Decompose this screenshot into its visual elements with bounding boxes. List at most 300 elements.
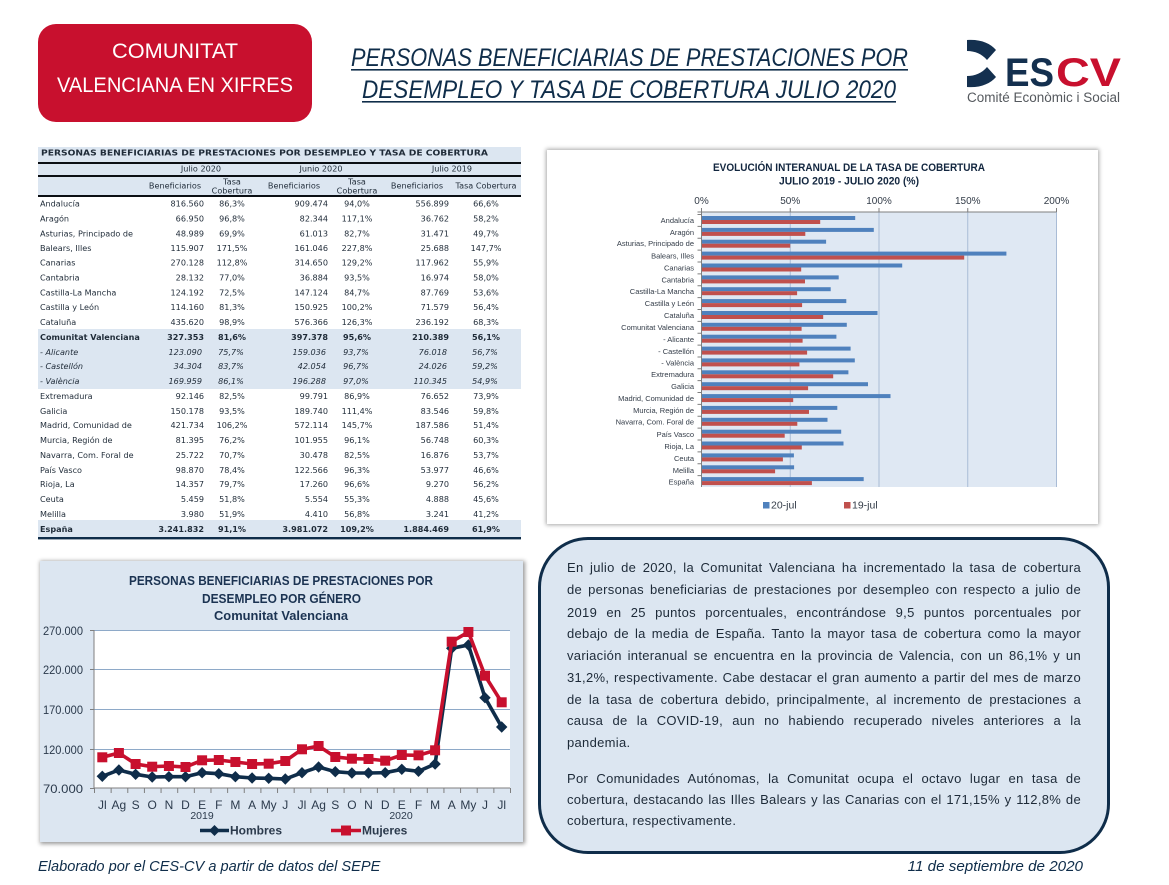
footer source: Elaborado por el CES-CV a partir de datos del SEPE [38,859,380,875]
row: Canarias [40,258,499,268]
text panel: comentario: cobertura, respectivamente. [567,813,736,828]
category labels: - Alicante [663,335,694,344]
text panel: comentario: causa de la COVID-19, aun no habiendo recuperado niveles anteriores a la [567,713,1081,728]
category labels: Cantabria [661,276,695,284]
category labels: Balears, Illes [651,252,694,260]
x axis labels: My [261,798,277,812]
row: Cataluña [40,317,499,327]
row: Aragón: 96,8% [219,214,245,224]
row: Aragón: 66.950 [176,214,204,224]
row: Madrid: 145,7% [342,420,373,430]
row: Asturias: 49,7% [473,228,499,238]
text panel: comentario: variación interanual se encuentra en la provincia de Valencia, con un 86,1% y un [567,648,1081,663]
row: Alicante: - Alicante [40,347,78,357]
row: España: 1.884.469 [403,524,449,534]
row: Castilla y León: 81,3% [219,302,245,312]
x axis labels: N [165,798,173,812]
row: València [40,376,498,386]
row: Rioja: 17.260 [300,479,328,489]
x axis labels: J [282,798,288,812]
row: Madrid: 421.734 [171,420,204,430]
row: Extremadura: 99.791 [300,391,328,401]
text panel: comentario: debajo de la media de España. Tanto la mayor tasa de cobertura como la mayor [567,626,1081,641]
row: Aragón: 117,1% [342,214,373,224]
row: Balears: 25.688 [421,243,449,253]
row: València: 54,9% [472,376,498,386]
row: Murcia: 101.955 [295,435,328,445]
row: Cataluña: 98,9% [219,317,245,327]
row: Ceuta: 5.459 [181,494,204,504]
x axis labels: A [448,798,456,812]
row: Navarra: 53,7% [473,450,499,460]
y axis labels [43,624,83,796]
row: País Vasco: 53.977 [421,465,449,475]
footer date: 11 de septiembre de 2020 [908,858,1083,875]
x axis labels: Jl [497,798,506,812]
row: Murcia: Murcia, Región de [40,435,112,445]
row: Extremadura: 76.652 [421,391,449,401]
row: Balears: 147,7% [471,243,502,253]
text panel: comentario: 2019 en 25 puntos porcentuales, encontrándose 9,5 puntos porcentuales por [567,605,1081,620]
y axis labels: 170.000 [43,703,83,717]
row: Rioja: 96,6% [344,479,370,489]
row: Castilla y León: Castilla y León [40,302,99,312]
row: Castellón: 83,7% [218,361,244,371]
chart title: JULIO 2019 - JULIO 2020 (%) [779,176,919,188]
row: Castilla-La Mancha: 53,6% [473,288,499,298]
row: Cataluña: 576.366 [295,317,328,327]
row: España: 61,9% [472,524,500,534]
axis labels: 150% [955,196,981,207]
table header: Julio 2019 [431,164,472,174]
legend [200,824,408,838]
chart title: Comunitat Valenciana [214,608,349,623]
row: Cataluña: 435.620 [171,317,204,327]
row: Murcia: 56.748 [421,435,449,445]
row: Cataluña: 236.192 [416,317,449,327]
x axis labels: O [148,798,157,812]
y axis labels: 220.000 [43,663,83,677]
row: Comunitat Valenciana [40,332,500,342]
chart title [129,573,434,623]
row: Canarias: 314.650 [295,258,328,268]
row: Castellón: 34.304 [174,361,202,371]
row: València: 86,1% [218,376,244,386]
row: Andalucía: Andalucía [40,198,80,208]
row: Asturias: 69,9% [219,228,245,238]
text panel: comentario: 31,2%, respectivamente. Cabe destacar el gran aumento a partir del mes de marzo [567,670,1081,685]
x axis labels: E [398,798,406,812]
category labels: Ceuta [674,454,695,463]
title: PERSONAS BENEFICIARIAS DE PRESTACIONES POR [351,44,908,72]
row: Ceuta: Ceuta [40,494,64,504]
row: Castilla-La Mancha: Castilla-La Mancha [40,288,116,298]
row: Cantabria: Cantabria [40,272,80,282]
badge: Comunitat Valenciana en xifres [38,24,312,122]
row: Canarias: 55,9% [473,258,499,268]
row: Ceuta: 51,8% [219,494,245,504]
row: Cantabria: 58,0% [473,272,499,282]
row: Comunitat Valenciana: Comunitat Valenciana [40,332,140,342]
row: Extremadura: 86,9% [344,391,370,401]
row: Castellón: 96,7% [343,361,369,371]
row: Melilla: 3.241 [426,509,449,519]
logo: CES-CV: Comité Econòmic i Social [967,90,1120,105]
title [351,44,908,104]
row: Castellón: 42.054 [298,361,326,371]
row: Comunitat Valenciana: 95,6% [343,332,371,342]
row: Castilla y León: 71.579 [421,302,449,312]
row: País Vasco: 96,3% [344,465,370,475]
bar chart: tasa de cobertura [616,161,1069,512]
table header: Beneficiarios [149,180,201,190]
year labels [190,810,413,822]
row: País Vasco: 78,4% [219,465,245,475]
x axis labels: D [381,798,390,812]
panel: line chart background [40,561,523,842]
text panel: comentario: cobertura, destacando las Illes Balears y las Canarias con el 171,15% y 112,8% de [567,792,1081,807]
row: Balears: 115.907 [171,243,204,253]
row: Castilla y León: 114.160 [171,302,204,312]
text panel: comentario: En julio de 2020, la Comunitat Valenciana ha incrementado la tasa de cobertura [567,560,1081,575]
row: Balears: 161.046 [295,243,328,253]
category labels: Asturias, Principado de [617,239,694,248]
row: Melilla [40,509,499,519]
x axis labels: S [132,798,140,812]
row: Galicia: 189.740 [295,406,328,416]
table header [149,164,517,196]
row: País Vasco: 98.870 [176,465,204,475]
axis labels: 100% [866,196,892,207]
row: Asturias: 48.989 [176,228,204,238]
table header: Beneficiarios [391,180,443,190]
row: Castilla-La Mancha: 147.124 [295,288,328,298]
row: Alicante: 76.018 [419,347,447,357]
row: Canarias: 270.128 [171,258,204,268]
row: País Vasco: 122.566 [295,465,328,475]
row: Cataluña: 68,3% [473,317,499,327]
row: Canarias: 117.962 [416,258,449,268]
x axis labels: Ag [311,798,326,812]
axis labels: 200% [1044,196,1069,207]
row: Rioja: Rioja, La [40,479,75,489]
series: Mujeres [98,628,506,772]
x axis labels: E [198,798,206,812]
table title: PERSONAS BENEFICIARIAS DE PRESTACIONES POR DESEMPLEO Y TASA DE COBERTURA [41,148,489,158]
badge: Comunitat Valenciana en xifres: VALENCIANA EN XIFRES [57,74,293,97]
row: Melilla: 3.980 [181,509,204,519]
table header: Tasa [347,176,366,186]
table header: Tasa [222,176,241,186]
row: Asturias: 61.013 [300,228,328,238]
row: Castilla-La Mancha [40,288,499,298]
axis labels: 0% [694,196,709,207]
row: Ceuta: 55,3% [344,494,370,504]
row: Asturias: 82,7% [344,228,370,238]
row: Madrid: 106,2% [217,420,248,430]
row: Galicia [40,406,499,416]
x axis labels: F [215,798,222,812]
table header: Cobertura [212,186,252,196]
row: Murcia: 76,2% [219,435,245,445]
row: Rioja: 56,2% [473,479,499,489]
row: Madrid [40,420,499,430]
row: Andalucía: 94,0% [344,198,370,208]
badge: Comunitat Valenciana en xifres: COMUNITAT [112,40,238,63]
year labels: 2019 [190,810,214,822]
row: España: 3.981.072 [282,524,328,534]
row: Aragón: Aragón [40,214,69,224]
row: Madrid: Madrid, Comunidad de [40,420,132,430]
row: Galicia: 93,5% [219,406,245,416]
row: Navarra: 16.876 [421,450,449,460]
category labels: Aragón [670,228,694,237]
row: Castellón: 24.026 [419,361,447,371]
category labels: Andalucía [661,216,695,225]
x axis labels: J [482,798,488,812]
row: Murcia: 60,3% [473,435,499,445]
legend [763,500,878,512]
row: Castellón: 59,2% [472,361,498,371]
row: València: 110.345 [414,376,447,386]
category labels: Comunitat Valenciana [621,323,695,332]
chart title: DESEMPLEO POR GÉNERO [202,591,361,606]
row: Rioja: 14.357 [176,479,204,489]
row: Melilla: 4.410 [305,509,328,519]
row: Comunitat Valenciana: 210.389 [412,332,449,342]
row: País Vasco: 46,6% [473,465,499,475]
row: Melilla: Melilla [40,509,66,519]
category labels: Castilla-La Mancha [630,287,695,296]
category labels: Castilla y León [645,299,694,308]
row: Cataluña: 126,3% [342,317,373,327]
row: Cantabria: 36.884 [300,272,328,282]
row: Castilla y León: 100,2% [342,302,373,312]
x axis labels: Jl [98,798,107,812]
logo: CES-CV: CV [1056,51,1121,95]
row: Castilla y León: 56,4% [473,302,499,312]
row: Canarias: 129,2% [342,258,373,268]
row: Cantabria: 28.132 [176,272,204,282]
category labels: Cataluña [664,311,695,320]
row: Navarra [40,450,499,460]
text panel: comentario: de la tasa de cobertura debido, principalmente, al incremento de prestaciones a [567,692,1081,707]
category labels: Madrid, Comunidad de [618,394,694,403]
x axis labels: A [248,798,256,812]
y axis labels: 270.000 [43,624,83,638]
table header: Tasa Cobertura [455,180,517,190]
row: Canarias: 112,8% [217,258,248,268]
row: Castilla-La Mancha: 84,7% [344,288,370,298]
row: Melilla: 51,9% [219,509,245,519]
text panel: comentario [538,537,1110,854]
category labels: Rioja, La [664,442,695,451]
x axis labels: M [430,798,440,812]
row: España: 109,2% [340,524,374,534]
series: 20-jul [702,216,1006,481]
row: Balears: Balears, Illes [40,243,91,253]
row: Madrid: 572.114 [295,420,328,430]
row: País Vasco: País Vasco [40,465,82,475]
row: Alicante: 56,7% [472,347,498,357]
legend: Hombres [230,824,282,838]
row: Galicia: Galicia [40,406,67,416]
category labels: País Vasco [657,430,694,439]
row: Rioja: 79,7% [219,479,245,489]
axis labels [694,196,1069,207]
row: Alicante: 93,7% [343,347,369,357]
row: España: España [40,524,73,534]
row: Extremadura: 73,9% [473,391,499,401]
row: Cantabria: 77,0% [219,272,245,282]
row: València: 169.959 [169,376,202,386]
category labels: - València [661,358,695,368]
row: Canarias: Canarias [40,258,75,268]
row: Cantabria [40,272,499,282]
table: beneficiarios y tasa de cobertura [38,147,521,540]
row: Extremadura: Extremadura [40,391,93,401]
row: Aragón: 58,2% [473,214,499,224]
row: Comunitat Valenciana: 397.378 [291,332,328,342]
row: Andalucía: 66,6% [473,198,499,208]
row: Madrid: 51,4% [473,420,499,430]
row: España: 91,1% [218,524,246,534]
row: España: 3.241.832 [158,524,204,534]
row: Asturias: 31.471 [421,228,449,238]
row: Cantabria: 16.974 [421,272,449,282]
text panel: comentario: pandemia. [567,735,630,750]
row: Galicia: 59,8% [473,406,499,416]
row: Asturias: Asturias, Principado de [40,228,133,238]
row: Castellón [40,361,498,371]
table header: Junio 2020 [298,164,343,174]
row: Navarra: 30.478 [300,450,328,460]
row: Extremadura [40,391,499,401]
row: Andalucía: 909.474 [295,198,328,208]
legend: 20-jul [771,500,797,512]
row: Navarra: 82,5% [344,450,370,460]
row: Comunitat Valenciana: 81,6% [218,332,246,342]
row: València: 196.288 [293,376,326,386]
row: Castilla y León [40,302,499,312]
row: Navarra: Navarra, Com. Foral de [40,450,134,460]
axis labels: 50% [780,196,800,207]
row: Galicia: 83.546 [421,406,449,416]
row: España [40,524,500,534]
row: Alicante: 123.090 [169,347,202,357]
row: Asturias [40,228,499,238]
title: DESEMPLEO Y TASA DE COBERTURA JULIO 2020 [362,76,896,104]
row: País Vasco [40,465,499,475]
row: Andalucía: 86,3% [219,198,245,208]
x axis labels: F [415,798,422,812]
row: Murcia [40,435,499,445]
row: Comunitat Valenciana: 327.353 [167,332,204,342]
row: Andalucía: 556.899 [416,198,449,208]
row: Navarra: 25.722 [176,450,204,460]
year labels: 2020 [389,810,413,822]
logo: CES-CV [967,40,1121,105]
category labels: España [669,478,695,486]
row: Ceuta: 45,6% [473,494,499,504]
row: Rioja: 9.270 [426,479,449,489]
row: Murcia: 81.395 [176,435,204,445]
category labels: Canarias [664,264,694,272]
chart title: EVOLUCIÓN INTERANUAL DE LA TASA DE COBERTURA [713,161,985,174]
row: Extremadura: 82,5% [219,391,245,401]
row: València: - València [40,376,80,386]
series: 19-jul [702,220,964,485]
x axis labels: D [181,798,190,812]
legend: Mujeres [362,824,408,838]
row: Castellón: - Castellón [40,361,83,371]
row: Alicante: 159.036 [293,347,326,357]
x axis labels: My [460,798,476,812]
x axis labels: Jl [298,798,306,812]
row: Alicante [40,347,498,357]
y axis labels: 70.000 [43,782,83,796]
row: Castilla y León: 150.925 [295,302,328,312]
row: Ceuta [40,494,499,504]
row: Cantabria: 93,5% [344,272,370,282]
row: Madrid: 187.586 [416,420,449,430]
legend: 19-jul [852,500,878,512]
panel: bar chart evolución interanual [547,150,1098,524]
row: Extremadura: 92.146 [176,391,204,401]
row: Murcia: 96,1% [344,435,370,445]
row: Andalucía: 816.560 [171,198,204,208]
row: Cataluña: Cataluña [40,317,76,327]
row: Balears: 227,8% [342,243,373,253]
category labels: Galicia [671,382,695,391]
row: Castilla-La Mancha: 124.192 [171,288,204,298]
logo: CES-CV: ES [1005,51,1054,95]
category labels: Extremadura [651,370,695,379]
series: Hombres [97,640,507,784]
x axis labels: M [230,798,240,812]
text panel: comentario: Por Comunidades Autónomas, la Comunitat ocupa el octavo lugar en tasa de [567,771,1081,786]
table header: Beneficiarios [268,180,320,190]
x axis labels: S [331,798,339,812]
row: Ceuta: 4.888 [426,494,449,504]
row: Galicia: 150.178 [171,406,204,416]
row: Balears: 171,5% [217,243,248,253]
row: Aragón: 82.344 [300,214,328,224]
row: Castilla-La Mancha: 72,5% [219,288,245,298]
row: Aragón [40,214,499,224]
row: València: 97,0% [343,376,369,386]
category labels: Melilla [673,466,695,475]
row: Rioja [40,479,499,489]
chart title: PERSONAS BENEFICIARIAS DE PRESTACIONES POR [129,573,434,588]
x axis labels [98,798,506,812]
category labels: Murcia, Región de [633,406,694,415]
row: Comunitat Valenciana: 56,1% [472,332,500,342]
table header: Julio 2020 [180,164,221,174]
x axis labels: O [347,798,357,812]
x axis labels: N [364,798,373,812]
row: Alicante: 75,7% [218,347,244,357]
row: Melilla: 41,2% [473,509,499,519]
row: Andalucía [40,198,499,208]
row: Navarra: 70,7% [219,450,245,460]
chart title [713,161,985,188]
row: Balears [40,243,502,253]
table header: Cobertura [337,186,377,196]
row: Ceuta: 5.554 [305,494,328,504]
text panel: comentario: de personas beneficiarias de prestaciones por desempleo con respecto a julio de [567,582,1081,597]
category labels: - Castellón [658,347,694,356]
